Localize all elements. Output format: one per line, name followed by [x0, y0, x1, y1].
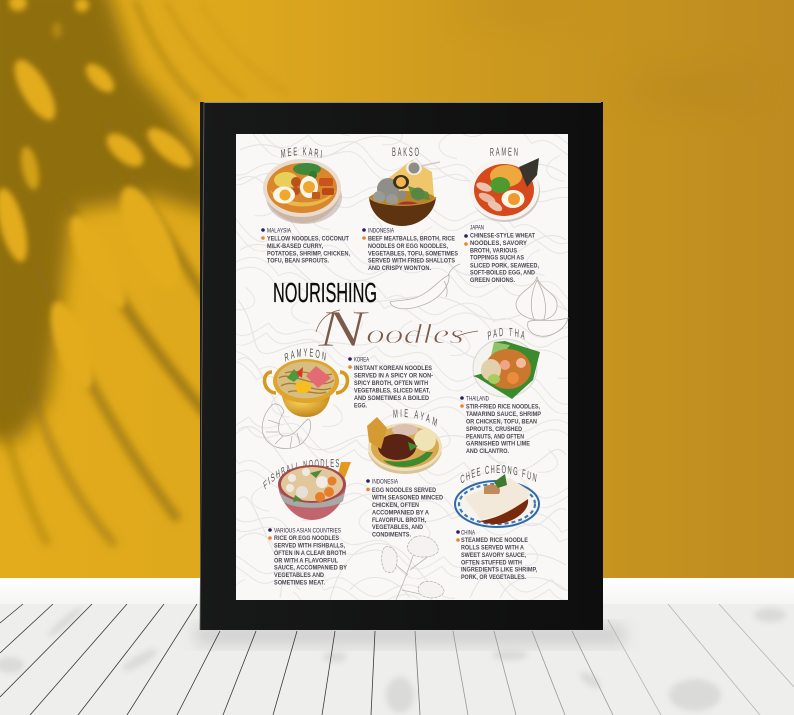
lit patches between leaves	[0, 0, 199, 393]
description: ramen	[464, 233, 539, 284]
description: pad thai: OR CHICKEN, TOFU, BEAN	[466, 419, 537, 425]
description: fishball noodles	[268, 536, 347, 586]
description: mie ayam: ACCOMPANIED BY A	[372, 510, 430, 516]
sketch: cilantro	[381, 536, 444, 600]
heading: mie ayam: MIE AYAM	[393, 409, 438, 427]
description: ramyeon: VEGETABLES, SLICED MEAT,	[354, 388, 430, 394]
panel: bakso	[362, 148, 458, 272]
description: bakso: NOODLES OR EGG NOODLES,	[368, 244, 448, 250]
wooden floor	[0, 604, 794, 715]
description: ramyeon: SERVED IN A SPICY OR NON-	[354, 373, 433, 379]
region: Korea: KOREA	[354, 356, 369, 364]
region: Thailand: THAILAND	[466, 395, 489, 402]
description: chee cheong fun	[456, 538, 537, 581]
upper right wall shading	[450, 0, 760, 104]
description: pad thai: PEANUTS, AND OFTEN	[466, 434, 524, 440]
panel: mee kari	[261, 147, 350, 265]
description: mie ayam: CHICKEN, OFTEN	[372, 503, 419, 509]
description: mie ayam: EGG NOODLES SERVED	[372, 488, 437, 494]
description: ramen: NOODLES, SAVORY	[470, 241, 527, 247]
region: Various Asian Countries: VARIOUS ASIAN COUNTRIES	[274, 527, 341, 534]
heading: ramen: RAMEN	[490, 148, 518, 156]
floor wood grain	[0, 605, 786, 713]
sketch: garlic	[516, 277, 568, 336]
description: mie ayam: VEGETABLES, AND	[372, 525, 424, 531]
description: ramen: GREEN ONIONS.	[470, 278, 515, 284]
panel: pad thai	[335, 328, 541, 496]
description: ramen: SOFT-BOILED EGG, AND	[470, 271, 536, 277]
description: pad thai: SPROUTS, CRUSHED	[466, 427, 523, 433]
description: mie ayam: CONDIMENTS.	[372, 532, 411, 538]
description: mie ayam: FLAVORFUL BROTH,	[372, 518, 426, 524]
description: pad thai: GARNISHED WITH LIME	[466, 442, 530, 448]
region: China: CHINA	[461, 529, 476, 536]
poster	[236, 134, 568, 600]
illustration: ramen bowl	[469, 158, 540, 222]
description: bakso: BEEF MEATBALLS, BROTH, RICE	[368, 236, 455, 242]
description: ramen: BROTH, VARIOUS	[470, 248, 517, 254]
sketch: chili	[390, 264, 460, 309]
sketch: shrimp	[262, 404, 311, 449]
region: Korea	[348, 356, 369, 364]
title: Noodles script	[316, 301, 478, 358]
description: ramyeon	[348, 365, 433, 409]
skirting board	[0, 578, 794, 604]
panel: ramyeon	[262, 348, 433, 417]
description: chee cheong fun: STEAMED RICE NOODLE	[461, 538, 528, 544]
heading: bakso: BAKSO	[392, 148, 419, 156]
region: Indonesia: INDONESIA	[372, 478, 399, 485]
description: pad thai: TAMARIND SAUCE, SHRIMP	[466, 412, 541, 418]
panel: mie ayam	[366, 409, 444, 538]
description: mee kari	[261, 236, 350, 265]
panel: fishball noodles	[263, 459, 351, 586]
region: Japan: JAPAN	[470, 224, 484, 231]
description: bakso: SERVED WITH FRIED SHALLOTS	[368, 259, 455, 265]
description: fishball noodles: OR WITH A FLAVORFUL	[274, 558, 338, 564]
region: Malaysia: MALAYSIA	[267, 227, 292, 234]
description: bakso: AND CRISPY WONTON.	[368, 266, 431, 272]
description: chee cheong fun: ROLLS SERVED WITH A	[461, 545, 525, 551]
description: mee kari: POTATOES, SHRIMP, CHICKEN,	[267, 251, 350, 257]
description: fishball noodles: SERVED WITH FISHBALLS,	[274, 543, 345, 549]
illustration: fishball bowl	[278, 462, 351, 520]
palm leaf shadow on wall	[0, 0, 244, 548]
background noodle pattern	[236, 134, 568, 600]
illustration: bakso bowl	[369, 160, 440, 226]
title: Noodles script: N	[317, 301, 371, 358]
description: ramen: TOPPINGS SUCH AS	[470, 256, 524, 262]
description: ramyeon: EGG.	[354, 403, 367, 409]
description: mee kari: TOFU, BEAN SPROUTS.	[267, 259, 329, 265]
heading: mee kari: MEE KARI	[281, 147, 322, 158]
illustration: mie ayam bowl	[367, 417, 442, 474]
region: Thailand	[460, 395, 489, 402]
description: ramyeon: INSTANT KOREAN NOODLES	[354, 366, 432, 372]
description: fishball noodles: OFTEN IN A CLEAR BROTH	[274, 551, 346, 557]
description: chee cheong fun: SWEET SAVORY SAUCE,	[461, 553, 526, 559]
description: fishball noodles: SAUCE, ACCOMPANIED BY	[274, 566, 347, 572]
region: Indonesia: INDONESIA	[368, 227, 395, 234]
picture frame	[200, 102, 603, 630]
description: mie ayam: WITH SEASONED MINCED	[372, 496, 444, 502]
title: Nourishing: NOURISHING	[273, 277, 377, 308]
description: fishball noodles: VEGETABLES AND	[274, 573, 325, 579]
description: bakso	[362, 236, 458, 272]
illustration: pad thai plate	[473, 339, 540, 399]
illustration: chee cheong fun plate	[455, 474, 539, 527]
description: chee cheong fun: PORK, OR VEGETABLES.	[461, 575, 526, 581]
description: mee kari: MILK-BASED CURRY,	[267, 244, 323, 250]
illustration: ramyeon pot	[265, 359, 347, 417]
description: ramen: CHINESE-STYLE WHEAT	[470, 233, 535, 239]
description: chee cheong fun: INGREDIENTS LIKE SHRIMP,	[461, 568, 537, 574]
heading: fishball noodles: FISHBALL NOODLES	[263, 459, 339, 490]
description: ramen: SLICED PORK, SEAWEED,	[470, 263, 539, 269]
panel: ramen	[464, 148, 540, 284]
frame shadow on floor	[195, 625, 625, 645]
panel: chee cheong fun	[454, 465, 540, 581]
description: chee cheong fun: OFTEN STUFFED WITH	[461, 560, 522, 566]
heading: chee cheong fun: CHEE CHEONG FUN	[460, 465, 537, 483]
floor plank lines	[0, 604, 794, 715]
description: ramyeon: SPICY BROTH, OFTEN WITH	[354, 381, 428, 387]
description: mie ayam	[366, 488, 444, 538]
description: bakso: VEGETABLES, TOFU, SOMETIMES	[368, 251, 458, 257]
description: fishball noodles: RICE OR EGG NOODLES	[274, 536, 339, 542]
description: fishball noodles: SOMETIMES MEAT.	[274, 580, 325, 586]
illustration: mee kari bowl	[263, 159, 342, 224]
description: pad thai: STIR-FRIED RICE NOODLES,	[466, 404, 540, 410]
description: ramyeon: AND SOMETIMES A BOILED	[354, 396, 430, 402]
title: Noodles script: oodles	[366, 319, 464, 349]
description: pad thai: AND CILANTRO.	[466, 449, 509, 455]
description: pad thai	[460, 404, 541, 455]
description: mee kari: YELLOW NOODLES, COCONUT	[267, 236, 349, 242]
heading: ramyeon: RAMYEON	[284, 348, 326, 362]
